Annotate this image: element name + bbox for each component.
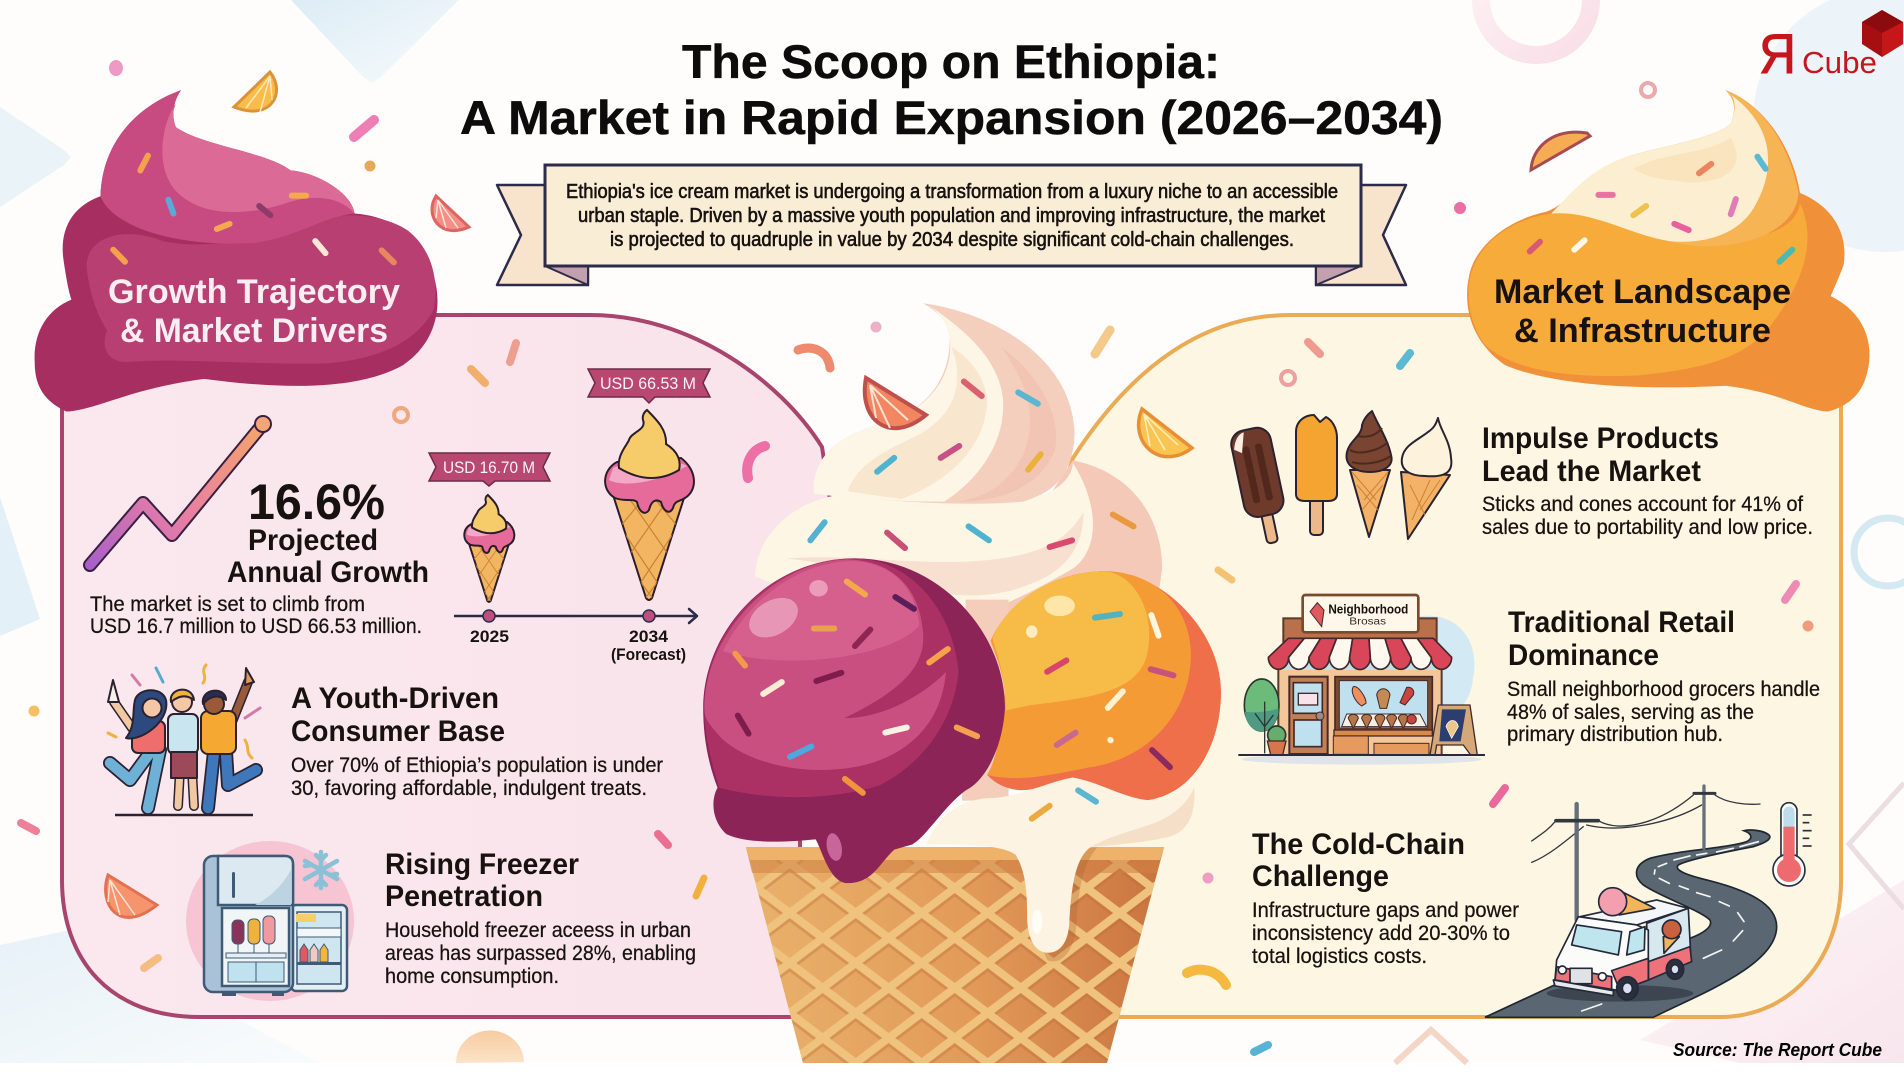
axis labels: 2025 — [470, 627, 509, 646]
chart: cone size comparison 2025 vs 2034 — [429, 369, 710, 664]
text: freezer — [385, 919, 696, 988]
berry scoop — [703, 558, 1005, 883]
axis labels: 2034 — [629, 627, 669, 646]
chocolate cone — [1347, 411, 1392, 537]
heading: retail: Dominance — [1508, 639, 1659, 672]
value tag USD 66.53 M — [588, 369, 710, 403]
text: freezer: Household freezer aceess in urban — [385, 919, 691, 942]
heading: youth-driven: Consumer Base — [291, 715, 505, 748]
heading: cold chain: Challenge — [1252, 860, 1389, 893]
logo: RCube — [1759, 10, 1903, 85]
timeline arrow — [454, 609, 697, 623]
heading: freezer: Rising Freezer — [385, 848, 579, 881]
intro text: Ethiopia's ice cream market is undergoing a transformation from a luxury niche to an accessible — [566, 181, 1338, 203]
logo: RCube: Cube — [1802, 45, 1877, 80]
text: market climb: USD 16.7 million to USD 66.53 million. — [90, 615, 422, 638]
panel: growth trajectory background — [62, 315, 830, 1017]
value tag USD 16.70 M: USD 16.70 M — [443, 458, 535, 477]
value tag USD 66.53 M: USD 66.53 M — [600, 374, 696, 393]
text: impulse: Sticks and cones account for 41% of — [1482, 493, 1803, 516]
text: cold chain — [1252, 899, 1519, 968]
heading: growth trajectory: Growth Trajectory — [108, 273, 400, 311]
text: impulse: sales due to portability and low price. — [1482, 516, 1813, 539]
text: market climb — [90, 593, 422, 638]
intro text — [566, 181, 1338, 251]
text: cold chain: total logistics costs. — [1252, 945, 1427, 968]
soft serve swirl — [755, 303, 1162, 801]
text: freezer: areas has surpassed 28%, enabling — [385, 942, 696, 965]
large cone 2034 — [605, 410, 694, 600]
heading: freezer — [385, 848, 579, 913]
icon: rising trend arrow — [90, 416, 271, 565]
text: impulse — [1482, 493, 1813, 539]
ice cream truck — [1547, 888, 1693, 1002]
intro ribbon banner — [497, 165, 1406, 285]
title: A Market in Rapid Expansion (2026–2034) — [460, 91, 1443, 144]
heading: impulse: Impulse Products — [1482, 422, 1719, 455]
power lines — [1532, 786, 1760, 920]
heading: youth-driven — [291, 682, 505, 748]
icon: open fridge — [186, 841, 354, 1001]
heading: market landscape: Market Landscape — [1494, 273, 1791, 311]
text: youth: 30, favoring affordable, indulgent treats. — [291, 777, 647, 800]
title — [460, 35, 1443, 144]
label: projected annual growth — [227, 524, 429, 589]
text: retail: Small neighborhood grocers handle — [1507, 678, 1820, 701]
text: cold chain: Infrastructure gaps and power — [1252, 899, 1519, 922]
text: market climb: The market is set to climb from — [90, 593, 365, 616]
heading line two: & Market Drivers — [120, 312, 388, 350]
heading: youth-driven: A Youth-Driven — [291, 682, 499, 715]
text: retail: 48% of sales, serving as the — [1507, 701, 1754, 724]
axis labels: (Forecast) — [611, 645, 686, 664]
stat: 16.6%: 16.6% — [248, 474, 385, 530]
axis labels — [470, 627, 686, 664]
icon: neighborhood shop: Neighborhood — [1328, 602, 1408, 616]
logo: RCube: Я — [1759, 22, 1796, 85]
thermometer — [1773, 803, 1812, 886]
panel: market landscape background — [1060, 315, 1841, 1017]
heading: impulse — [1482, 422, 1719, 488]
icon: youth group — [108, 665, 260, 815]
icon: impulse products — [1229, 411, 1451, 547]
title: The Scoop on Ethiopia: — [682, 35, 1220, 88]
text: retail: primary distribution hub. — [1507, 723, 1723, 746]
intro text: urban staple. Driven by a massive youth population and improving infrastructure, the market — [578, 205, 1325, 227]
orange scoop — [987, 571, 1221, 801]
section header blob: growth trajectory — [35, 90, 437, 412]
value tag USD 16.70 M — [429, 453, 550, 486]
icon: snowflake — [305, 852, 337, 888]
text: retail — [1507, 678, 1820, 746]
text: youth — [291, 754, 663, 800]
text: cold chain: inconsistency add 20-30% to — [1252, 922, 1510, 945]
heading: retail: Traditional Retail — [1508, 606, 1735, 639]
central ice cream scoops — [703, 303, 1221, 961]
heading: freezer: Penetration — [385, 880, 543, 913]
text: freezer: home consumption. — [385, 965, 559, 988]
melting vanilla drip — [926, 777, 1194, 961]
large waffle cone — [746, 847, 1164, 1063]
heading: cold chain: The Cold-Chain — [1252, 828, 1465, 861]
text: youth: Over 70% of Ethiopia’s population is under — [291, 754, 663, 777]
heading line two: & Infrastructure — [1514, 312, 1771, 350]
heading: cold chain — [1252, 828, 1465, 893]
heading: impulse: Lead the Market — [1482, 455, 1701, 488]
citrus slice on swirl — [865, 378, 926, 428]
icon: neighborhood shop — [1238, 595, 1485, 765]
heading: retail — [1508, 606, 1735, 672]
road — [1485, 830, 1777, 1017]
small cone 2025 — [464, 495, 514, 602]
icon: ice cream truck on road with power lines — [1485, 786, 1812, 1017]
icon: neighborhood shop: Brosas — [1349, 617, 1386, 628]
intro text: is projected to quadruple in value by 2034 despite significant cold-chain challenges. — [610, 229, 1294, 251]
section header blob: market landscape — [1467, 90, 1870, 412]
vanilla cone — [1401, 418, 1451, 539]
orange popsicle — [1296, 415, 1337, 535]
label: projected annual growth: Annual Growth — [227, 556, 429, 589]
road dashes — [1582, 842, 1758, 1011]
chocolate popsicle — [1229, 425, 1292, 547]
sprinkles on scoops — [735, 382, 1174, 819]
source note: Source: The Report Cube — [1673, 1040, 1882, 1060]
label: projected annual growth: Projected — [248, 524, 378, 557]
